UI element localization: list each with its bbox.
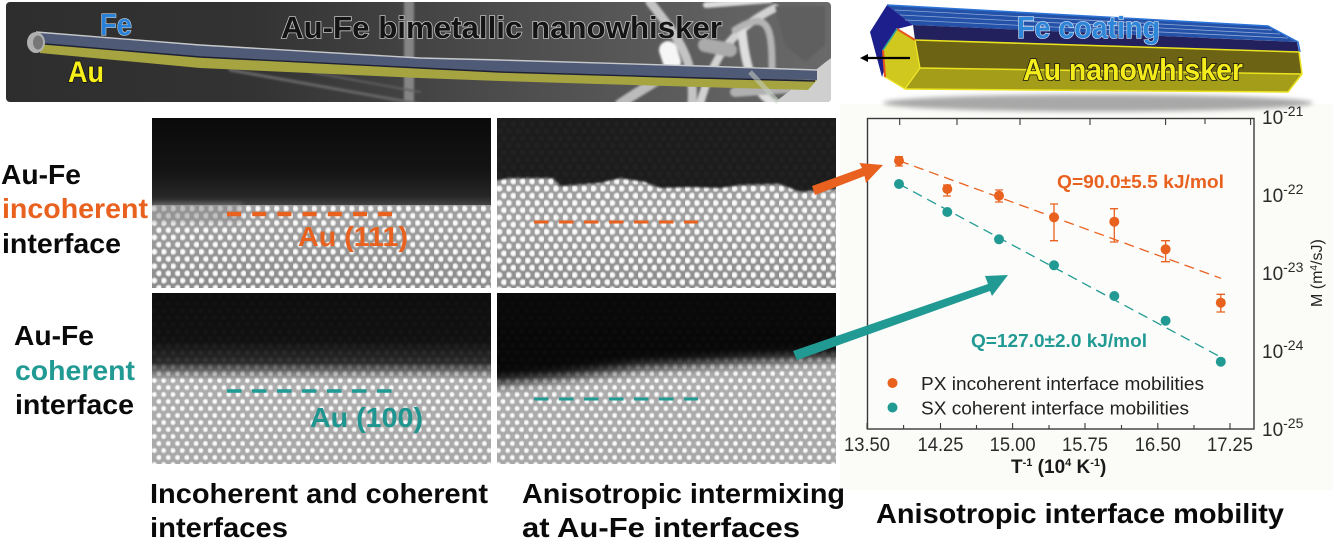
- x axis tick labels: 15.00: [990, 434, 1036, 456]
- shadow: [883, 94, 1313, 112]
- x axis tick labels: [844, 434, 1253, 456]
- y axis tick labels: -21: [1283, 103, 1304, 119]
- y axis tick labels: -25: [1283, 415, 1304, 431]
- y axis tick labels: 10: [1262, 108, 1283, 129]
- interface dashes: [227, 389, 392, 393]
- y axis tick labels: -22: [1283, 181, 1304, 197]
- panel: incoherent intermixing micrograph: [497, 118, 836, 288]
- panel: chart background: [840, 104, 1333, 490]
- heading: Au-Fe coherent interface: interface: [15, 389, 134, 420]
- y axis tick labels: [1262, 103, 1304, 441]
- x axis title: -1: [1023, 457, 1032, 469]
- panel: incoherent Au(111) micrograph: [152, 118, 491, 288]
- label: Fe coating: Fe coating: [1017, 10, 1160, 45]
- axis ticks: [867, 119, 1251, 429]
- y axis tick labels: 10: [1262, 264, 1283, 285]
- x axis title: ): [1100, 457, 1106, 478]
- label: Au: Au: [68, 56, 104, 89]
- orange points: [894, 156, 1226, 308]
- panel: coherent Au(100) micrograph: [152, 293, 491, 464]
- heading: Au-Fe coherent interface: Au-Fe: [14, 320, 94, 351]
- label: Q incoherent: Q=90.0±5.5 kJ/mol: [1057, 172, 1224, 192]
- label: whisker title: Au-Fe bimetallic nanowhisker: [281, 10, 722, 45]
- heading: Au-Fe incoherent interface: Au-Fe: [1, 159, 81, 190]
- chart: interface mobility vs inverse temperature: [844, 103, 1326, 478]
- x axis tick labels: 14.25: [918, 434, 964, 456]
- x axis tick labels: 13.50: [844, 434, 890, 456]
- teal points: [894, 179, 1226, 367]
- legend: SX coherent interface mobilities: [921, 398, 1189, 418]
- interface dashes: [227, 212, 392, 216]
- Au core body: [883, 29, 1302, 92]
- x axis title: K: [1071, 457, 1091, 478]
- arrow: [860, 54, 910, 62]
- y axis tick labels: 10: [1262, 420, 1283, 441]
- x axis title: T: [1011, 457, 1023, 478]
- arrow: teal to coherent data: [793, 275, 1008, 360]
- Fe coating body: [870, 5, 1300, 77]
- x axis title: (10: [1032, 457, 1065, 478]
- interface dashes: [534, 398, 698, 400]
- orange fit line: [899, 161, 1221, 278]
- plot frame: [868, 118, 1254, 429]
- label: Fe: Fe: [100, 7, 132, 42]
- caption: anisotropic intermixing: [522, 478, 845, 539]
- heading: Au-Fe coherent interface: [14, 320, 135, 420]
- caption: incoherent and coherent interfaces: [150, 478, 488, 539]
- y axis tick labels: -24: [1283, 337, 1304, 353]
- heading: Au-Fe incoherent interface: incoherent: [2, 193, 148, 224]
- caption: anisotropic intermixing: Anisotropic intermixing: [522, 478, 845, 509]
- panel: SEM image of nanowhisker: [6, 0, 831, 104]
- heading: Au-Fe incoherent interface: [1, 159, 148, 259]
- y axis tick labels: 10: [1262, 186, 1283, 207]
- x axis tick labels: 17.25: [1207, 434, 1253, 456]
- x axis title: -1: [1090, 457, 1100, 469]
- legend: [888, 373, 1204, 418]
- teal fit line: [899, 184, 1220, 357]
- panel: 3D nanowhisker schematic: [860, 5, 1313, 112]
- panel: coherent intermixing micrograph: [497, 293, 836, 464]
- label: Au (100): Au (100): [310, 402, 423, 433]
- x axis tick labels: 16.50: [1135, 434, 1181, 456]
- label: Au nanowhisker: Au nanowhisker: [1023, 52, 1243, 87]
- y axis title: 4: [1309, 265, 1320, 271]
- interface dashes: [534, 220, 698, 224]
- label: Au (111): Au (111): [298, 221, 408, 252]
- x axis tick labels: 15.75: [1062, 434, 1108, 456]
- heading: Au-Fe incoherent interface: interface: [2, 228, 121, 259]
- y axis title: /sJ): [1309, 239, 1326, 265]
- orange error bars: [895, 157, 1225, 312]
- caption: anisotropic interface mobility: Anisotropic interface mobility: [876, 498, 1284, 529]
- y axis title: M (m: [1309, 271, 1326, 307]
- label: Q coherent: Q=127.0±2.0 kJ/mol: [971, 331, 1147, 351]
- y axis tick labels: -23: [1283, 259, 1304, 275]
- legend: PX incoherent interface mobilities: [921, 373, 1204, 394]
- arrow: orange to incoherent data: [812, 163, 883, 195]
- y axis tick labels: 10: [1262, 342, 1283, 363]
- heading: Au-Fe coherent interface: coherent: [15, 355, 135, 386]
- x axis title: 4: [1065, 457, 1072, 469]
- caption: incoherent and coherent interfaces: Incoherent and coherent: [150, 478, 488, 509]
- whisker body: [27, 32, 817, 102]
